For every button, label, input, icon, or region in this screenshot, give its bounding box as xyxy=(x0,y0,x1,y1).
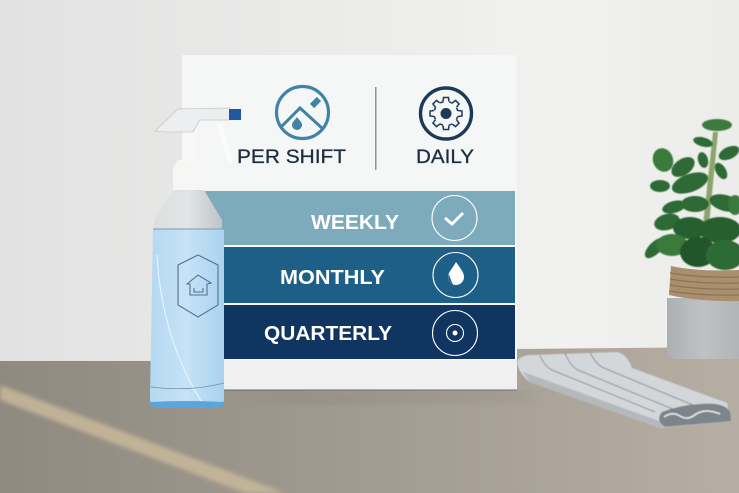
heading: daily: DAILY xyxy=(416,146,474,168)
bottle neck and cap xyxy=(173,160,205,190)
bottle shoulder xyxy=(154,190,222,229)
hexagon label with house xyxy=(178,255,218,317)
concrete pot xyxy=(667,298,739,359)
bottle tube xyxy=(157,255,203,404)
green leaves xyxy=(642,119,739,270)
panel: schedule board xyxy=(182,55,517,390)
spray trigger head xyxy=(155,108,230,132)
icon: daily gear xyxy=(420,88,472,139)
icon: check circle xyxy=(432,196,477,240)
blue nozzle tip xyxy=(229,109,241,120)
band: monthly: MONTHLY xyxy=(280,267,386,289)
bottle liquid xyxy=(150,229,224,408)
band: quarterly: QUARTERLY xyxy=(264,323,393,345)
band: quarterly xyxy=(224,305,515,359)
liquid pool at base xyxy=(150,401,224,408)
band: weekly xyxy=(205,191,515,245)
heading: per shift: PER SHIFT xyxy=(237,146,346,168)
twine wrap xyxy=(669,266,739,301)
icon: per shift roof and droplet xyxy=(276,86,328,138)
icon: water drop circle xyxy=(433,252,478,298)
folded towel xyxy=(517,352,731,428)
icon: target circle xyxy=(432,310,478,356)
spray bottle xyxy=(150,108,241,408)
table surface xyxy=(0,347,739,493)
band: monthly xyxy=(223,247,515,303)
wall background xyxy=(0,0,739,365)
potted plant xyxy=(642,119,739,359)
band: weekly: WEEKLY xyxy=(311,212,400,234)
divider between per shift and daily xyxy=(375,87,376,170)
